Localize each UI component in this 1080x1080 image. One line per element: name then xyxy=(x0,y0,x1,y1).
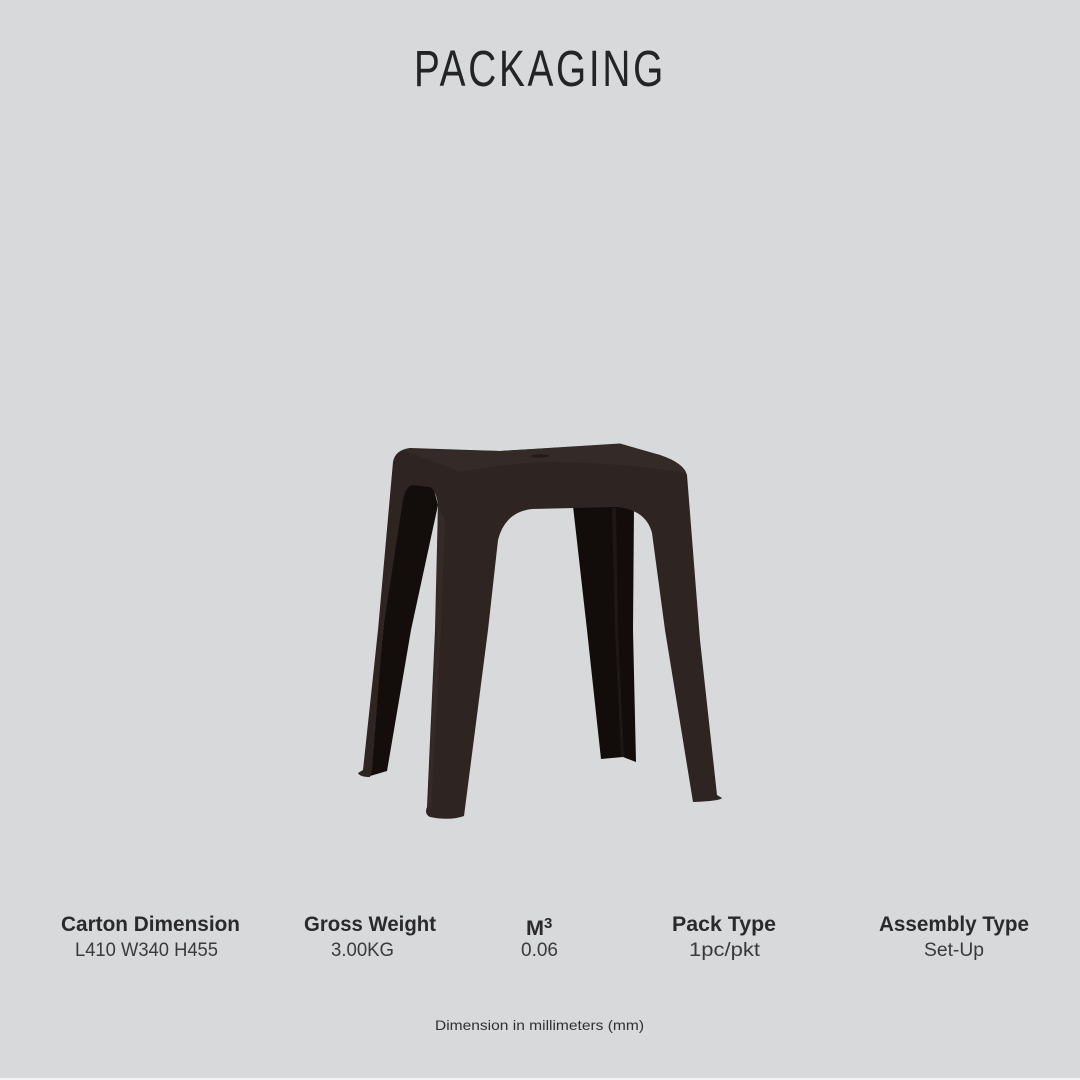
title: PACKAGING xyxy=(414,40,663,97)
footnote: Dimension in millimeters (mm) xyxy=(435,1017,644,1033)
spec: cubic metres: 3 xyxy=(544,915,552,932)
spec: gross weight: 3.00KG xyxy=(331,940,394,961)
spec: carton dimension: Carton Dimension xyxy=(61,913,240,936)
spec: carton dimension: L410 W340 H455 xyxy=(75,940,218,961)
seat hole xyxy=(531,454,549,458)
spec: pack type xyxy=(672,913,776,961)
stool body xyxy=(358,444,722,819)
spec: gross weight: Gross Weight xyxy=(304,913,436,936)
spec: pack type: 1pc/pkt xyxy=(689,940,761,961)
spec: cubic metres xyxy=(521,915,558,961)
spec: pack type: Pack Type xyxy=(672,913,776,936)
spec: cubic metres: 0.06 xyxy=(521,940,558,961)
product image: stool xyxy=(358,444,722,819)
left leg inner xyxy=(370,478,438,776)
spec: carton dimension xyxy=(61,913,240,961)
leg shading xyxy=(428,505,445,808)
spec: gross weight xyxy=(304,913,436,961)
spec: assembly type: Set-Up xyxy=(924,940,984,961)
spec: cubic metres: M xyxy=(526,917,544,940)
back leg xyxy=(573,506,636,762)
spec: assembly type: Assembly Type xyxy=(879,913,1029,936)
seat top surface xyxy=(403,444,686,473)
spec: assembly type xyxy=(879,913,1029,961)
